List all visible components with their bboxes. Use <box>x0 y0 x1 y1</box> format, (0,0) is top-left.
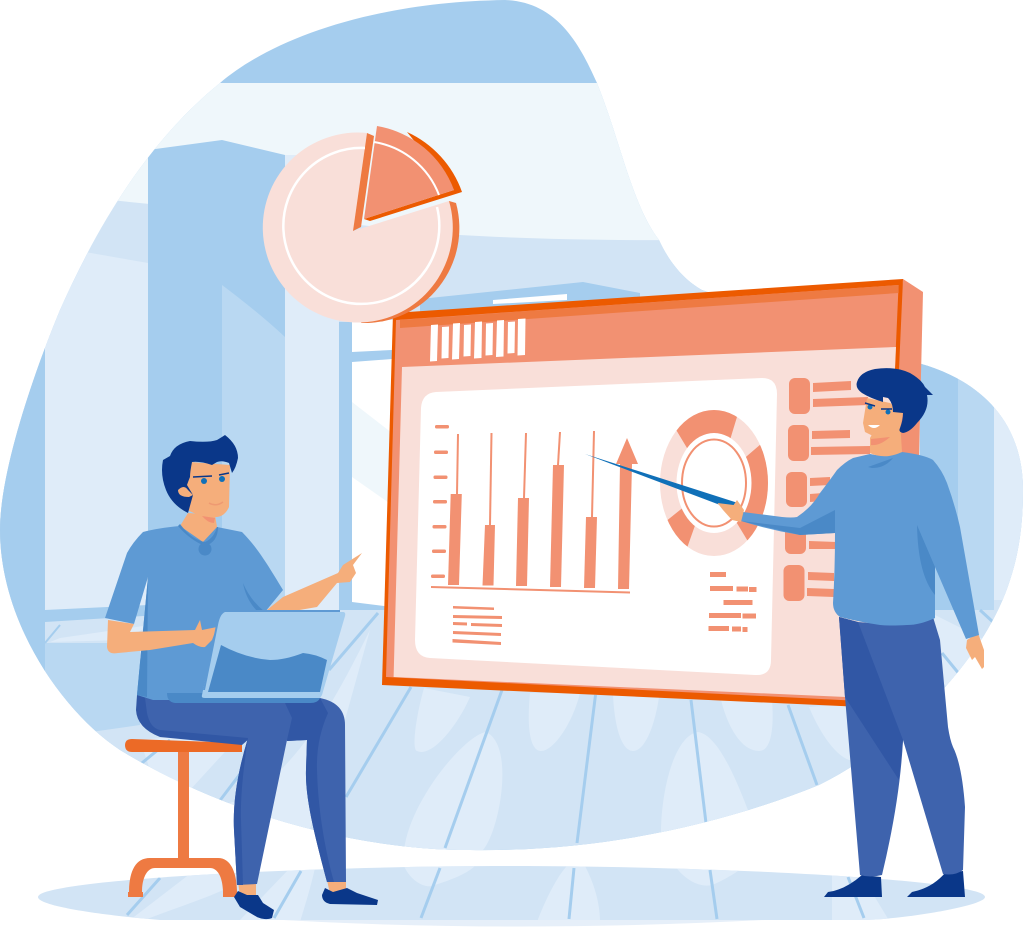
donut chart <box>660 410 768 556</box>
left shoe <box>234 891 274 919</box>
pie chart <box>263 126 462 323</box>
pointer stick <box>585 454 738 511</box>
trousers <box>839 617 965 876</box>
hair <box>857 368 933 433</box>
board side panel <box>880 279 923 540</box>
detached slice <box>364 126 462 221</box>
neck <box>180 513 217 542</box>
board left strip <box>386 285 899 702</box>
laptop screen <box>202 611 345 698</box>
laptop wave <box>208 645 327 692</box>
front leg <box>145 698 292 885</box>
bar chart <box>431 425 638 594</box>
stool <box>125 739 242 897</box>
left shoe <box>907 871 965 897</box>
skin: ankles <box>238 880 346 896</box>
white chart card <box>415 378 777 675</box>
lower hand <box>966 633 984 669</box>
board screen panel <box>394 347 896 699</box>
standing man <box>585 368 984 897</box>
laptop base <box>167 693 320 703</box>
pointing arm <box>267 553 362 615</box>
trouser shading <box>839 617 903 780</box>
laptop <box>167 610 345 703</box>
seat shadow <box>136 695 250 745</box>
sweater shading <box>741 510 935 595</box>
seated man <box>105 435 378 919</box>
neck <box>870 420 902 456</box>
collar button <box>198 542 212 556</box>
rear pants <box>285 698 346 882</box>
left chart legend lines <box>452 606 502 645</box>
right chart legend lines <box>708 572 756 632</box>
neck shadow <box>202 516 215 523</box>
facial features <box>865 403 892 428</box>
neck shadow <box>871 437 890 445</box>
board frame <box>382 279 903 708</box>
face <box>863 398 903 438</box>
header top band <box>400 285 899 328</box>
shirt shading <box>137 577 265 697</box>
ear <box>178 487 193 497</box>
right side legend <box>784 378 870 601</box>
eyes and brows <box>193 473 229 505</box>
sweater <box>741 452 979 639</box>
resting arm <box>107 620 217 653</box>
presentation board <box>382 279 923 708</box>
collar <box>178 524 218 546</box>
pie wedge edge <box>353 133 374 231</box>
collar fold <box>868 458 893 468</box>
right shoe <box>322 888 378 905</box>
pie body <box>263 133 453 323</box>
floor ellipse <box>38 866 985 926</box>
face <box>180 462 230 517</box>
header bars <box>430 318 526 362</box>
pie inner ring <box>283 148 439 304</box>
pie shadow rim <box>361 201 459 323</box>
right shoe <box>824 875 882 897</box>
t-shirt <box>105 526 290 700</box>
pointing hand <box>718 500 744 522</box>
hair <box>162 435 238 513</box>
